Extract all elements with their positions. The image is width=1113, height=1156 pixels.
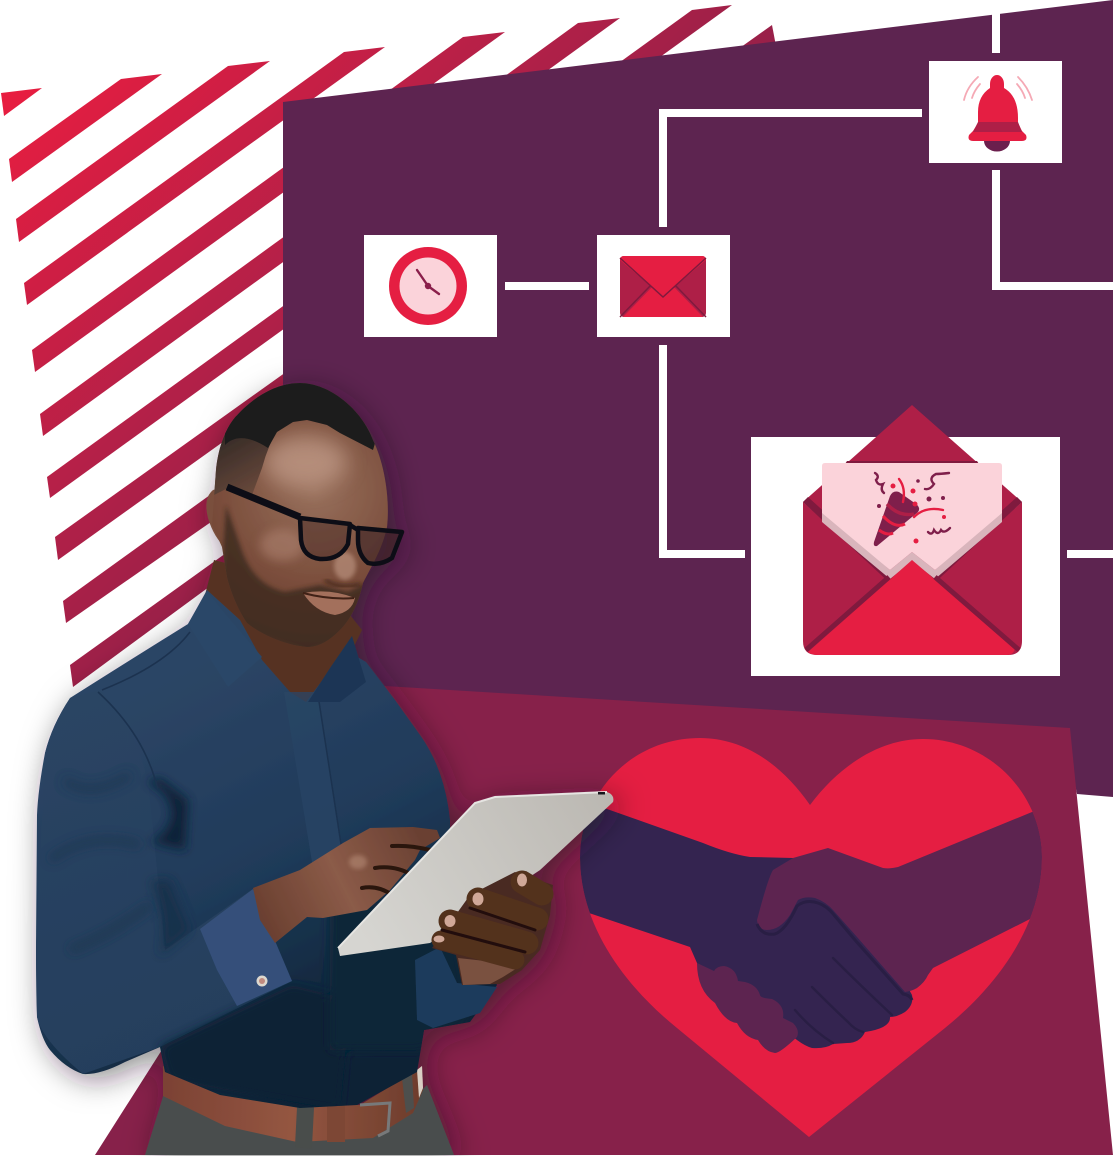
head <box>206 380 402 652</box>
envelope front flap <box>808 560 1015 655</box>
forehead highlight <box>263 436 347 488</box>
icon: clock box <box>364 235 497 337</box>
beard <box>222 505 372 652</box>
icon: small envelope box <box>597 235 730 337</box>
left shirt collar <box>188 591 262 687</box>
purple fingers <box>697 963 798 1053</box>
right purple arm and hand <box>757 812 1042 992</box>
finger lines <box>795 958 892 1043</box>
paper shadow <box>822 510 1002 579</box>
cheek and nose highlight <box>260 529 304 561</box>
diagonal stripes background <box>1 5 776 687</box>
shirt shading <box>36 632 470 1110</box>
mouth <box>303 591 355 615</box>
cufflink <box>256 976 268 986</box>
left navy arm and hand <box>570 800 912 1048</box>
touching hand <box>253 827 440 943</box>
trousers <box>145 1085 454 1155</box>
panel: purple workflow background <box>283 0 1113 797</box>
icon: heart with handshake <box>570 738 1060 1137</box>
holding hand <box>432 872 553 985</box>
heart <box>580 738 1042 1137</box>
neck <box>205 560 362 702</box>
hair fade <box>214 416 271 495</box>
envelope body <box>803 502 1022 655</box>
belt <box>163 1066 423 1148</box>
face <box>212 383 388 647</box>
workflow connector lines <box>505 9 1113 558</box>
lower right sleeve <box>415 947 497 1028</box>
tablet <box>338 792 613 956</box>
shirt cuff <box>200 889 292 1006</box>
party popper cone <box>874 492 919 546</box>
panel: maroon handshake background <box>95 680 1113 1155</box>
hair top <box>225 380 376 450</box>
envelope flap <box>803 405 1022 600</box>
ear <box>206 488 236 548</box>
icon: bell box <box>929 61 1062 163</box>
nose shadow <box>325 580 360 586</box>
shirt body and sleeves <box>36 590 497 1108</box>
glasses <box>227 487 402 564</box>
thumb and knuckle shadow <box>757 902 912 1000</box>
right shirt collar <box>308 636 366 702</box>
confetti <box>875 473 950 534</box>
man with tablet <box>36 380 613 1155</box>
icon: open envelope with party popper <box>751 405 1060 676</box>
paper card <box>822 463 1002 570</box>
